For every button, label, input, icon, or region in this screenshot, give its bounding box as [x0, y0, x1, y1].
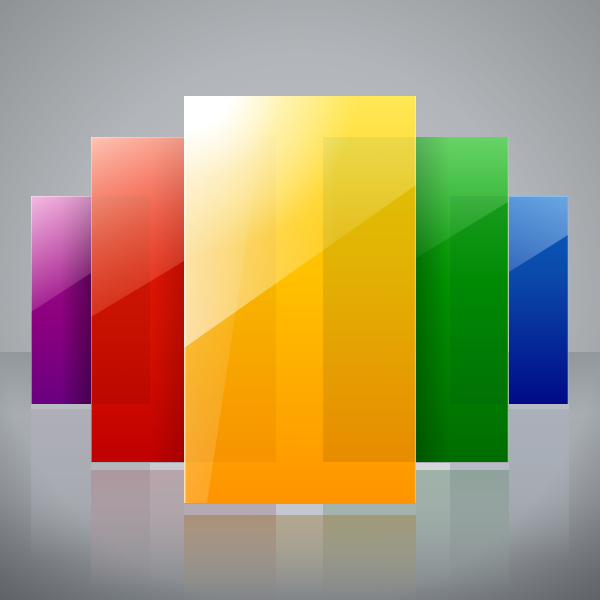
reflection: yellow panel: [184, 515, 416, 600]
red panel seen through yellow: [184, 137, 276, 462]
reflection: green panel: [416, 470, 509, 590]
background wall: [0, 0, 600, 352]
panel: red: [91, 137, 184, 462]
purple panel seen through red: [91, 196, 150, 404]
floor: [0, 352, 600, 600]
reflection: purple panel: [31, 409, 91, 560]
reflection: blue panel: [509, 409, 569, 560]
green panel seen through yellow: [323, 137, 416, 462]
panel: yellow: [184, 96, 416, 503]
reflection: red panel: [91, 470, 184, 590]
vertical shine: [184, 137, 262, 503]
panel: green: [416, 137, 508, 462]
panel: purple: [31, 196, 91, 404]
diagonal gloss: [184, 96, 416, 348]
floor light strips under panels: [31, 404, 569, 515]
panel: blue: [509, 196, 568, 404]
blue panel seen through green: [450, 196, 508, 404]
